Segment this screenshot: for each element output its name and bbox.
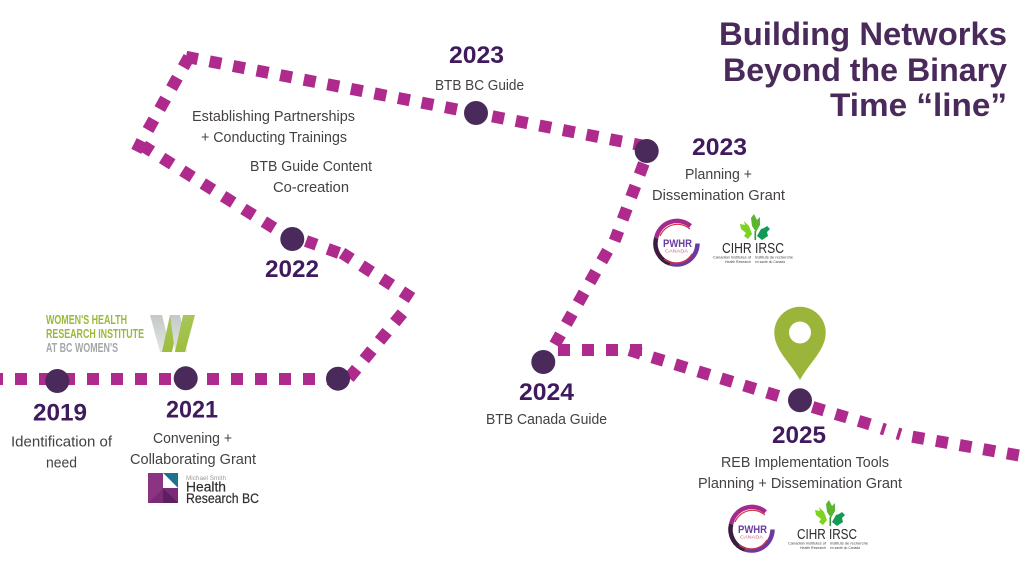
text: guide content co-creation: BTB Guide Content bbox=[250, 159, 372, 175]
milestone: 2025 bbox=[698, 422, 902, 492]
logo: PWHR Canada (2025): CANADA bbox=[740, 534, 763, 540]
milestone: 2024 bbox=[486, 379, 607, 428]
logo: Michael Smith Health Research BC: Health bbox=[186, 478, 226, 494]
milestone: 2025: REB Implementation Tools bbox=[721, 455, 889, 471]
milestone: 2019: Identification of bbox=[11, 435, 113, 451]
milestone: 2023 BC guide bbox=[435, 42, 524, 94]
logo: PWHR Canada (2023) bbox=[655, 221, 698, 265]
logo: PWHR Canada (2025) bbox=[730, 507, 772, 551]
milestone: 2023 BC guide: BTB BC Guide bbox=[435, 78, 524, 94]
logo: CIHR IRSC (2025) bbox=[788, 500, 868, 550]
logo: CIHR IRSC (2023): Canadian Institutes of bbox=[713, 256, 752, 260]
logo: CIHR IRSC (2025): Instituts de recherche bbox=[830, 542, 868, 546]
logo: Women's Health Research Institute: RESEARCH INSTITUTE bbox=[46, 327, 144, 341]
milestone: 2023 planning grant: Dissemination Grant bbox=[652, 188, 785, 204]
title: Beyond the Binary bbox=[723, 52, 1007, 88]
milestone: 2021: Convening + bbox=[153, 431, 232, 447]
text: establishing partnerships: Establishing Partnerships bbox=[192, 109, 355, 125]
logo: Michael Smith Health Research BC: Michael Smith bbox=[186, 476, 226, 482]
title bbox=[719, 16, 1007, 123]
milestone: 2025: 2025 bbox=[772, 422, 826, 449]
logo: CIHR IRSC (2023) bbox=[713, 214, 793, 264]
text: guide content co-creation: Co-creation bbox=[273, 180, 349, 196]
milestone: 2019: 2019 bbox=[33, 400, 87, 427]
milestone: 2022: 2022 bbox=[265, 256, 319, 283]
logo: CIHR IRSC (2025): en santé du Canada bbox=[830, 546, 861, 550]
logo: PWHR Canada (2023): CANADA bbox=[665, 248, 688, 254]
milestone: 2021: Collaborating Grant bbox=[130, 452, 256, 468]
logo: PWHR Canada (2023): PWHR bbox=[663, 238, 692, 250]
logo: CIHR IRSC (2023): en santé du Canada bbox=[755, 260, 786, 264]
title: Time “line” bbox=[830, 87, 1007, 123]
logo: CIHR IRSC (2023): Health Research bbox=[725, 260, 751, 264]
logo: Women's Health Research Institute: WOMEN'S HEALTH bbox=[46, 313, 127, 327]
logo: Michael Smith Health Research BC bbox=[148, 473, 259, 506]
logo: Michael Smith Health Research BC: Research BC bbox=[186, 490, 259, 506]
milestone: 2023 BC guide: 2023 bbox=[449, 42, 504, 69]
milestone: 2024: 2024 bbox=[519, 379, 575, 406]
milestone: 2021 bbox=[130, 396, 256, 468]
milestone: 2025: Planning + Dissemination Grant bbox=[698, 476, 902, 492]
logo: CIHR IRSC (2023): Instituts de recherche bbox=[755, 256, 793, 260]
logo: CIHR IRSC (2025): Health Research bbox=[800, 546, 826, 550]
milestone: 2023 planning grant bbox=[652, 134, 785, 204]
logo: CIHR IRSC (2025): Canadian Institutes of bbox=[788, 542, 827, 546]
icon: location pin bbox=[774, 307, 826, 380]
milestone: 2024: BTB Canada Guide bbox=[486, 412, 607, 428]
logo: Women's Health Research Institute: AT BC WOMEN'S bbox=[46, 341, 118, 355]
milestone: 2023 planning grant: 2023 bbox=[692, 134, 747, 161]
milestone: 2019 bbox=[11, 400, 113, 472]
text: guide content co-creation bbox=[250, 159, 372, 196]
logo: CIHR IRSC (2025): CIHR IRSC bbox=[797, 527, 857, 543]
text: establishing partnerships bbox=[192, 109, 355, 146]
milestone: 2021: 2021 bbox=[166, 396, 218, 423]
logo: PWHR Canada (2025): PWHR bbox=[738, 524, 767, 536]
milestone: 2019: need bbox=[46, 456, 77, 472]
milestone: 2023 planning grant: Planning + bbox=[685, 167, 752, 183]
dotted timeline path bbox=[0, 57, 1024, 459]
title: Building Networks bbox=[719, 16, 1007, 52]
milestone dots bbox=[45, 101, 812, 412]
text: establishing partnerships: + Conducting Trainings bbox=[201, 130, 347, 146]
logo: CIHR IRSC (2023): CIHR IRSC bbox=[722, 241, 784, 257]
logo: Women's Health Research Institute bbox=[46, 313, 195, 355]
